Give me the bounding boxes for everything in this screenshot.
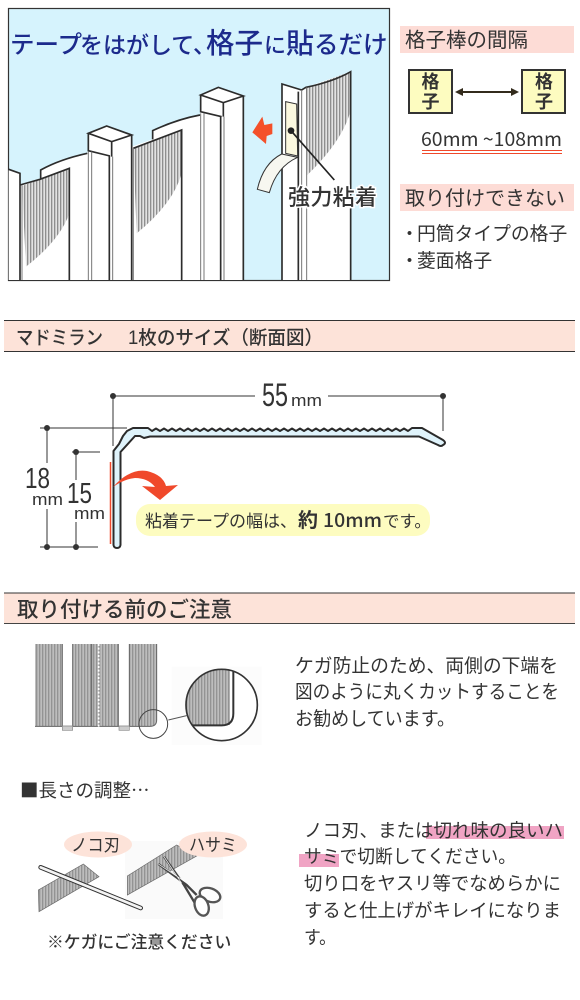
callout: adhesive tape width: です。 — [383, 513, 431, 531]
dimension: 55mm — [110, 377, 446, 446]
panel: cannot be installed — [400, 184, 574, 273]
illustration: cutting with scissors — [127, 845, 222, 918]
paragraph: cutting instructions: すると仕上げがキレイになりま — [304, 900, 561, 921]
highlight: sharp scissors — [299, 826, 564, 867]
arrow: spacing — [455, 88, 519, 96]
diagram: left lattice bar: 子 — [422, 92, 440, 112]
heading: length adjustment: ■長さの調整… — [20, 777, 150, 803]
heading: peel the tape and stick to the lattice: 格子 — [206, 28, 263, 60]
paragraph: cutting instructions: 切り口をヤスリ等でなめらかに — [304, 873, 561, 894]
dimension: 15mm: mm — [74, 504, 105, 523]
dimension: 18mm: 18 — [25, 463, 50, 495]
note: be careful of injury: ※ケガにご注意ください — [47, 929, 231, 953]
callout: adhesive tape width: 粘着テープの幅は、 — [145, 512, 297, 531]
arrow: red curved — [113, 471, 178, 500]
label: saw — [64, 832, 132, 858]
diagram: cross-section — [25, 377, 446, 550]
dimension: 55mm: 55 — [262, 377, 288, 413]
section header: precautions — [4, 593, 575, 624]
list: unsupported lattice types — [400, 219, 567, 273]
text: corner cut advice: お勧めしています。 — [295, 708, 455, 729]
heading: peel the tape and stick to the lattice: 、 — [193, 32, 216, 58]
label: scissors — [179, 832, 247, 858]
paragraph: cutting instructions: ノコ刃、または切れ味の良いハ — [304, 820, 563, 841]
list: unsupported lattice types: 菱面格子 — [417, 250, 492, 271]
diagram: left lattice bar: 格 — [422, 72, 440, 92]
text: corner cut advice — [295, 655, 559, 729]
callout: adhesive tape width: 約 — [298, 509, 318, 532]
label: saw: ノコ刃 — [71, 835, 120, 855]
illustration: cutting with a saw — [38, 864, 141, 912]
diagram: right lattice bar: 格 — [535, 72, 553, 92]
profile: section shape — [114, 428, 445, 548]
heading: peel the tape and stick to the lattice: 貼 — [286, 28, 314, 59]
measurement: 60mm to 108mm: 60mm ~108mm — [421, 125, 562, 152]
illustration: single bar with adhesive tape — [252, 72, 351, 280]
panel: lattice bar spacing — [400, 26, 574, 154]
dimension: 55mm: mm — [291, 391, 322, 410]
illustration: rounded cut blind corner — [35, 644, 262, 745]
paragraph: cutting instructions — [304, 820, 563, 948]
diagram: right lattice bar — [522, 70, 565, 113]
heading: lattice bar spacing — [400, 26, 574, 53]
heading: peel the tape and stick to the lattice: に — [264, 33, 286, 58]
section header: size — [4, 320, 575, 352]
label: scissors: ハサミ — [189, 835, 237, 855]
dimension: 15mm: 15 — [67, 478, 92, 510]
paragraph: cutting instructions: サミで切断してください。 — [304, 846, 516, 867]
section header: precautions: 取り付ける前のご注意 — [17, 598, 232, 622]
background: speckled paper — [125, 841, 223, 919]
dimension: 18mm — [25, 425, 127, 550]
callout: adhesive tape width: 10mm — [323, 506, 382, 533]
diagram: left lattice bar — [409, 70, 452, 113]
section header: size: 1枚のサイズ（断面図） — [128, 326, 323, 349]
callout: adhesive tape width — [136, 504, 431, 536]
heading: peel the tape and stick to the lattice: をはがして — [80, 32, 194, 58]
panel: installation illustration — [8, 8, 390, 280]
diagram: right lattice bar: 子 — [535, 92, 553, 112]
list: unsupported lattice types: ・ — [400, 219, 419, 246]
dimension: 18mm: mm — [32, 490, 63, 509]
heading: peel the tape and stick to the lattice: テープ — [10, 31, 83, 59]
list: unsupported lattice types: ・ — [400, 246, 419, 273]
heading: peel the tape and stick to the lattice: るだけ — [314, 32, 388, 59]
text: how to cut — [299, 820, 564, 948]
text: corner cut advice: ケガ防止のため、両側の下端を — [295, 655, 558, 676]
label: strong adhesive: 強力粘着 — [288, 185, 377, 210]
heading: lattice bar spacing: 格子棒の間隔 — [405, 29, 528, 52]
illustration: saw and scissors — [38, 832, 247, 919]
heading: cannot be installed: 取り付けできない — [405, 187, 565, 210]
paragraph: cutting instructions: す。 — [304, 927, 336, 948]
section header: size: マドミラン — [16, 328, 103, 349]
text: corner cut advice: 図のように丸くカットすることを — [295, 681, 559, 702]
dimension: 15mm — [67, 449, 105, 550]
illustration: fence of lattice bars with blinds — [9, 87, 243, 280]
list: unsupported lattice types: 円筒タイプの格子 — [417, 223, 567, 244]
adhesive tape marker — [110, 462, 112, 544]
